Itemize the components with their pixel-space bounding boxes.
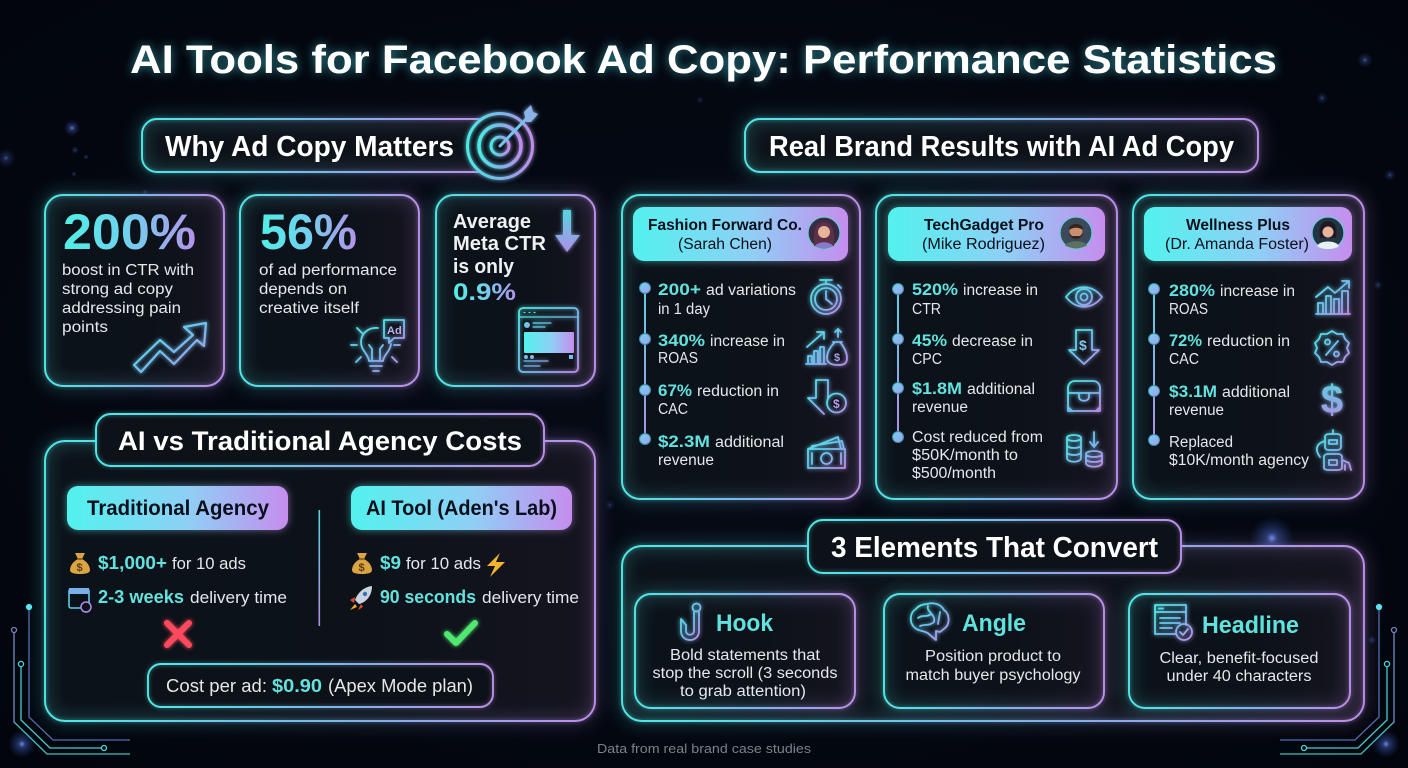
callout: cost per ad: [148, 664, 493, 707]
stat: CAC: [1169, 332, 1290, 368]
card: Headline: [1129, 594, 1350, 708]
card: Angle: [884, 594, 1104, 708]
stat: CTR: [912, 281, 1038, 318]
icon: document with check: [1155, 605, 1192, 640]
icon: eye: [1066, 287, 1102, 307]
card: Headline: Headline: [1202, 612, 1299, 639]
row: AI time: delivery time: [482, 589, 579, 607]
icon: light bulb with ad bubble: [351, 320, 404, 371]
stat: ROAS: 280%: [1169, 282, 1215, 300]
icon: social feed post: [519, 308, 578, 372]
stat: CAC: CAC: [658, 401, 688, 418]
icon: down arrow with coin: $: [833, 397, 840, 411]
icon: avatar Mike: [1060, 217, 1092, 249]
stat: revenue: $3.1M: [1169, 383, 1217, 401]
icon: rocket: [350, 586, 372, 610]
column header: Traditional Agency: Traditional Agency: [87, 497, 269, 520]
heading: 3 Elements That Convert: [808, 520, 1181, 573]
panel: 200% stat card: addressing pain: [62, 300, 181, 317]
stat: revenue: [912, 380, 1035, 416]
card: Hook: Hook: [716, 610, 774, 637]
icon: light bulb with ad bubble: Ad: [387, 325, 402, 337]
panel: 56% stat card: of ad performance: [259, 262, 397, 279]
heading: AI vs Traditional Agency Costs: AI vs Traditional Agency Costs: [118, 426, 522, 456]
icon: red cross: [167, 623, 189, 645]
stat: CAC: [658, 382, 779, 418]
stat: CPC: [912, 332, 1033, 368]
icon: chart and money bag: [806, 329, 847, 365]
stat: ROAS: ROAS: [658, 350, 698, 367]
panel: Meta CTR stat card: Average: [453, 211, 531, 233]
stat: CTR: CTR: [912, 301, 941, 318]
icon: percent badge: [1315, 331, 1349, 365]
stat: ad variations: [658, 281, 796, 318]
stat: revenue: revenue: [912, 399, 968, 416]
stat: CAC: reduction in: [697, 383, 779, 400]
card: Hook: stop the scroll (3 seconds: [652, 665, 838, 682]
stat: ROAS: [658, 332, 785, 367]
stat: CPC: 45%: [912, 332, 947, 350]
icon: coin stacks: [1067, 432, 1102, 467]
stat: ROAS: ROAS: [1169, 301, 1208, 318]
icon: down arrow: [555, 210, 580, 252]
heading: Why Ad Copy Matters: Why Ad Copy Matters: [165, 131, 454, 163]
stat: revenue: [1169, 383, 1290, 419]
icon: dollar down arrow: [1069, 330, 1099, 364]
stat: revenue: [658, 433, 784, 469]
panel: 200% stat card: strong ad copy: [62, 281, 173, 298]
icon: down arrow with coin: [808, 380, 846, 414]
brand header: (Dr. Amanda Foster): [1165, 236, 1309, 253]
icon: green check: [447, 623, 475, 643]
stat: ROAS: increase in: [1220, 283, 1295, 300]
stat: ROAS: increase in: [710, 333, 785, 350]
card: Hook: Bold statements that: [670, 647, 821, 664]
heading: AI vs Traditional Agency Costs: [96, 414, 544, 466]
icon: banknotes: [808, 437, 845, 468]
stat: CTR: increase in: [963, 282, 1038, 299]
card: Headline: under 40 characters: [1166, 668, 1312, 685]
panel: 56% stat card: 56%: [260, 204, 357, 260]
stat: ROAS: 340%: [658, 332, 705, 350]
icon: target with arrow: [466, 105, 538, 180]
stat: CTR: 520%: [912, 281, 958, 299]
stat: ad variations: in 1 day: [658, 301, 710, 318]
stat: revenue: additional: [1222, 384, 1290, 401]
brand header: TechGadget Pro: [924, 217, 1044, 234]
stat: revenue: $1.8M: [912, 380, 962, 398]
icon: treasure chest: [1068, 381, 1100, 411]
callout: cost per ad: (Apex Mode plan): [328, 676, 473, 696]
row: AI time: 90 seconds: [380, 587, 476, 607]
brand header: [888, 207, 1105, 261]
stat: revenue: revenue: [1169, 402, 1224, 419]
icon: lightning bolt: [487, 553, 505, 577]
callout: cost per ad: Cost per ad:: [166, 676, 267, 696]
stat: revenue: $2.3M: [658, 433, 710, 451]
row: AI price: [352, 553, 505, 577]
icon: avatar Sarah: [808, 217, 840, 249]
card: Angle: match buyer psychology: [906, 667, 1081, 684]
row: traditional price: for 10 ads: [172, 555, 246, 573]
panel: 200% stat card: points: [62, 319, 108, 336]
icon: money bag: [352, 553, 372, 574]
stat: ad variations: ad variations: [706, 282, 796, 299]
row: AI price: for 10 ads: [406, 555, 481, 573]
panel: 56% stat card: creative itself: [259, 300, 360, 317]
icon: dollar down arrow: $: [1079, 337, 1087, 353]
icon: fishhook: [681, 604, 700, 640]
icon: stopwatch: [811, 280, 841, 314]
icon: calendar with clock: [69, 588, 91, 612]
card: Headline: Clear, benefit-focused: [1160, 650, 1318, 667]
callout: cost per ad: $0.90: [272, 676, 322, 696]
row: traditional price: [70, 553, 246, 574]
card: Hook: [635, 594, 855, 708]
stat: revenue: additional: [967, 381, 1035, 398]
brand header: [633, 207, 848, 261]
heading: Real Brand Results: [745, 119, 1258, 172]
panel: Meta CTR stat card: [436, 195, 595, 386]
stat: replaced agency: [1169, 434, 1309, 469]
brand header: Wellness Plus: [1186, 217, 1290, 234]
panel: 200% stat card: 200%: [63, 204, 196, 260]
stat: replaced agency: $10K/month agency: [1169, 452, 1309, 469]
stat: revenue: revenue: [658, 452, 714, 469]
row: traditional price: $1,000+: [98, 553, 167, 573]
stat: CPC: decrease in: [952, 333, 1033, 350]
row: AI time: [350, 586, 579, 610]
stat: ad variations: 200+: [658, 281, 701, 299]
brand header: (Sarah Chen): [678, 236, 772, 253]
stat: CAC: CAC: [1169, 351, 1199, 368]
column header: AI Tool: AI Tool (Aden's Lab): [366, 497, 557, 520]
row: traditional time: [69, 587, 287, 612]
panel: AI vs Traditional Agency Costs: [45, 414, 595, 721]
row: traditional time: delivery time: [190, 589, 287, 607]
icon: robot: [1317, 430, 1351, 470]
icon: money bag: $: [76, 562, 83, 574]
stat: CPC: CPC: [912, 351, 942, 368]
panel: Wellness Plus: [1133, 195, 1364, 499]
stat: cost reduced: $50K/month to: [912, 447, 1018, 464]
title: AI Tools for Facebook Ad Copy: Performance Statistics: [130, 38, 1277, 82]
stat: ROAS: [1169, 282, 1295, 318]
stat: CAC: 72%: [1169, 332, 1202, 350]
panel: 3 Elements That Convert: [622, 520, 1364, 721]
icon: chart and money bag: $: [834, 352, 840, 364]
circuit decoration: right: [1280, 604, 1396, 754]
icon: growth chart: [1316, 281, 1350, 314]
icon: money bag: $: [358, 562, 365, 574]
panel: 56% stat card: depends on: [259, 281, 347, 298]
stat: cost reduced: [912, 429, 1043, 482]
panel: 200% stat card: [45, 195, 224, 386]
panel: Meta CTR stat card: Meta CTR: [453, 233, 547, 255]
column header: Traditional Agency: [67, 486, 288, 530]
stat: cost reduced: $500/month: [912, 465, 996, 482]
panel: Meta CTR stat card: 0.9%: [453, 279, 516, 306]
card: Angle: Position product to: [925, 648, 1061, 665]
stat: replaced agency: Replaced: [1169, 434, 1233, 451]
icon: brain: [911, 603, 949, 640]
row: AI price: $9: [380, 553, 401, 573]
stat: CAC: reduction in: [1207, 333, 1290, 350]
stat: cost reduced: Cost reduced from: [912, 429, 1043, 446]
stat: revenue: additional: [715, 434, 784, 451]
panel: 200% stat card: boost in CTR with: [62, 262, 194, 279]
column header: AI Tool: [351, 486, 572, 530]
panel: TechGadget Pro: [876, 195, 1117, 499]
heading: Why Ad Copy Matters: [142, 119, 492, 172]
panel: Meta CTR stat card: is only: [453, 256, 515, 278]
footer note: Data from real brand case studies: [597, 741, 812, 756]
panel: 56% stat card: [240, 195, 419, 386]
icon: rising arrow: [134, 323, 206, 372]
stat: CAC: 67%: [658, 382, 692, 400]
icon: avatar Amanda: [1312, 217, 1344, 249]
row: traditional time: 2-3 weeks: [98, 587, 184, 607]
heading: 3 Elements That Convert: 3 Elements That Convert: [831, 532, 1158, 564]
icon: money bag: [70, 553, 90, 574]
panel: Fashion Forward Co.: [622, 195, 860, 499]
brand header: (Mike Rodriguez): [922, 236, 1045, 253]
circuit decoration: left: [12, 604, 130, 754]
card: Angle: Angle: [962, 610, 1026, 637]
heading: Real Brand Results: Real Brand Results with AI Ad Copy: [769, 131, 1234, 163]
brand header: [1144, 207, 1352, 261]
card: Hook: to grab attention): [680, 683, 806, 700]
brand header: Fashion Forward Co.: [648, 217, 802, 234]
icon: dollar sign: $: [1321, 378, 1343, 422]
